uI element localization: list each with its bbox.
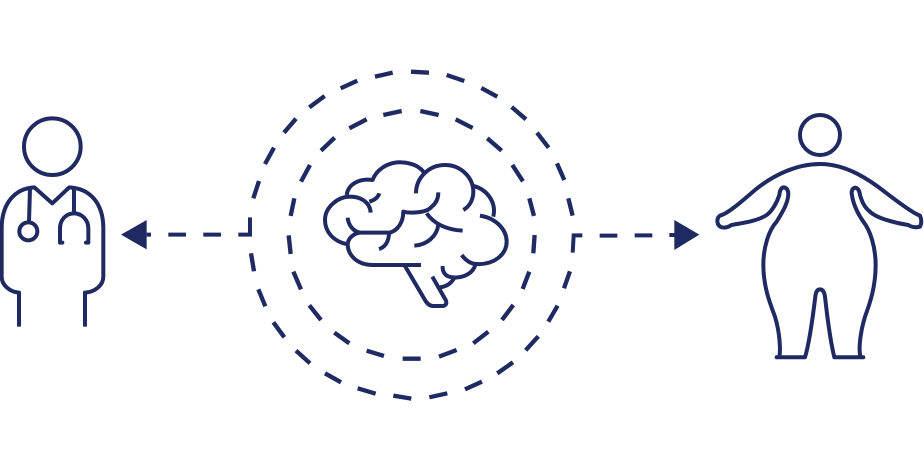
arrow: brain to doctor <box>121 217 250 249</box>
icon: person with obesity <box>717 115 921 357</box>
arrow: brain to person with obesity <box>573 220 699 253</box>
icon: doctor with stethoscope <box>2 118 103 327</box>
outer dashed circle <box>251 72 573 399</box>
inner dashed circle <box>289 111 535 359</box>
icon: brain <box>325 162 507 306</box>
